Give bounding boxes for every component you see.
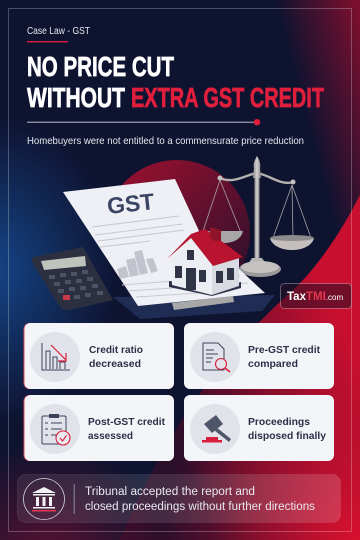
conclusion text: Tribunal accepted the report and <box>85 486 255 498</box>
conclusion text: closed proceedings without further directions <box>85 501 315 513</box>
title <box>27 51 324 113</box>
icon: GST document: GST <box>106 188 156 219</box>
conclusion bar <box>18 474 340 522</box>
card: proceedings <box>184 395 334 461</box>
subtitle: Homebuyers were not entitled to a commensurate price reduction <box>27 136 304 147</box>
label underline <box>27 41 68 42</box>
label: Proceedings <box>248 416 310 428</box>
icon: house <box>167 227 243 296</box>
card: credit ratio <box>24 323 174 389</box>
red circle backdrop <box>104 160 250 306</box>
label: Post-GST credit <box>88 416 165 428</box>
icon: document with magnifier <box>190 332 240 382</box>
label <box>88 416 165 442</box>
hero illustration <box>32 156 314 319</box>
label: Pre-GST credit <box>248 344 320 356</box>
icon: falling bar chart <box>30 332 80 382</box>
logo badge: TaxTMI.com <box>287 291 343 303</box>
icon: calculator <box>32 247 113 310</box>
icon: courthouse <box>24 478 64 520</box>
icon: gavel <box>190 404 240 454</box>
label: disposed finally <box>248 430 326 442</box>
icon: clipboard <box>113 295 275 319</box>
title: NO PRICE CUT <box>27 51 174 82</box>
label: compared <box>248 358 298 370</box>
category label: Case Law - GST <box>27 26 90 37</box>
icon: checklist <box>30 404 80 454</box>
header <box>27 26 324 147</box>
label: Credit ratio <box>89 344 143 356</box>
card: post-GST credit <box>24 395 174 461</box>
title rule with dot <box>27 119 260 125</box>
conclusion text <box>85 486 315 513</box>
card: pre-GST credit <box>184 323 334 389</box>
logo badge <box>280 284 352 308</box>
label <box>248 344 320 370</box>
icon: scales of justice <box>203 156 314 277</box>
icon: clip <box>172 296 234 310</box>
divider <box>74 484 75 514</box>
label: assessed <box>88 430 133 442</box>
icon: GST document <box>63 179 265 306</box>
label <box>248 416 326 442</box>
title: WITHOUT <box>27 82 125 113</box>
label <box>89 344 143 370</box>
label: decreased <box>89 358 141 370</box>
